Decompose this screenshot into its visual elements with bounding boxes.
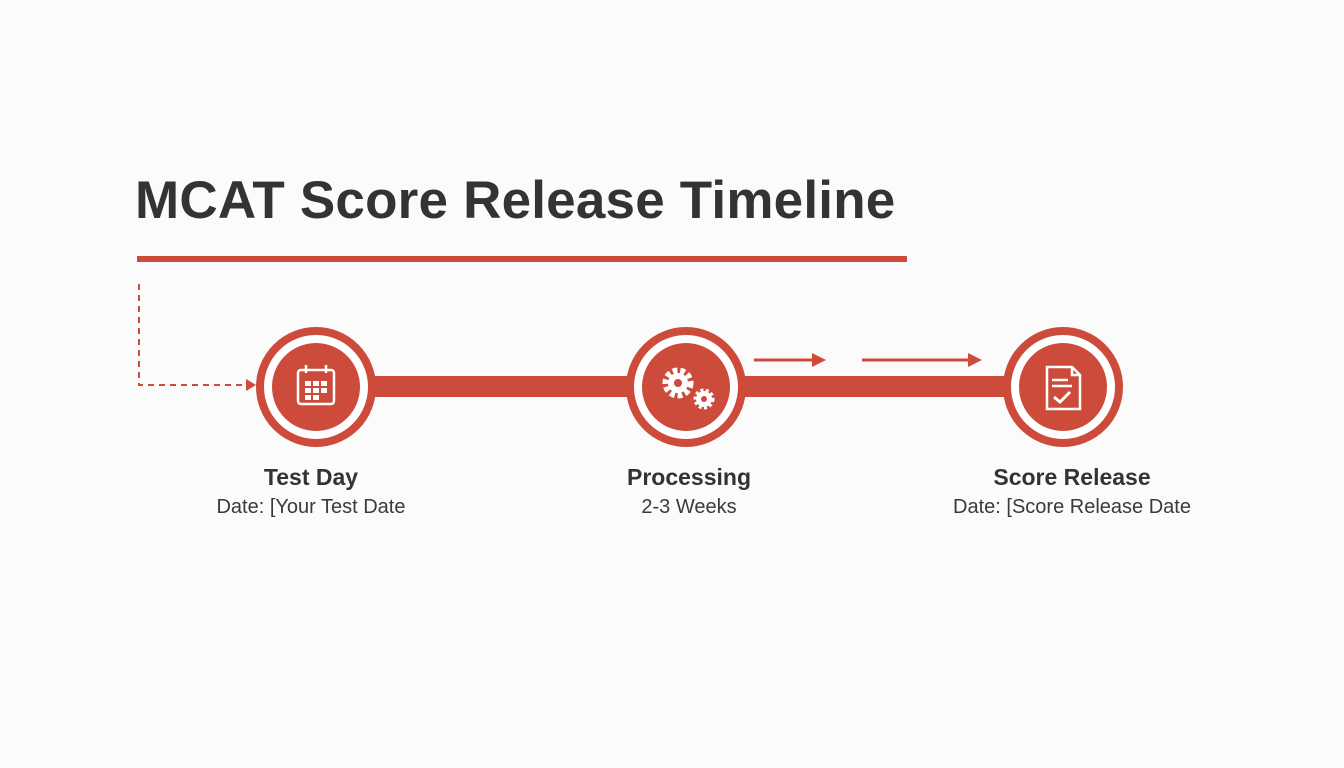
timeline bar	[316, 376, 1063, 397]
label: processing	[627, 464, 751, 518]
node: test day	[260, 331, 372, 443]
arrow 2	[862, 353, 982, 367]
arrow 1	[754, 353, 826, 367]
icon: gears	[666, 371, 713, 408]
node: score release	[1007, 331, 1119, 443]
label: test day: Test Day	[264, 464, 358, 490]
label: test day: Date: [Your Test Date	[216, 496, 406, 518]
dashed connector arrow	[139, 284, 256, 391]
label: score release: Date: [Score Release Date	[953, 496, 1191, 518]
label: score release	[953, 464, 1191, 518]
label: score release: Score Release	[993, 464, 1151, 490]
title underline	[137, 256, 907, 262]
node: processing	[630, 331, 742, 443]
label: test day	[216, 464, 406, 518]
title: MCAT Score Release Timeline	[135, 171, 895, 230]
icon: calendar	[298, 365, 334, 404]
label: processing: 2-3 Weeks	[641, 496, 737, 518]
label: processing: Processing	[627, 464, 751, 490]
icon: document check	[1047, 367, 1080, 409]
